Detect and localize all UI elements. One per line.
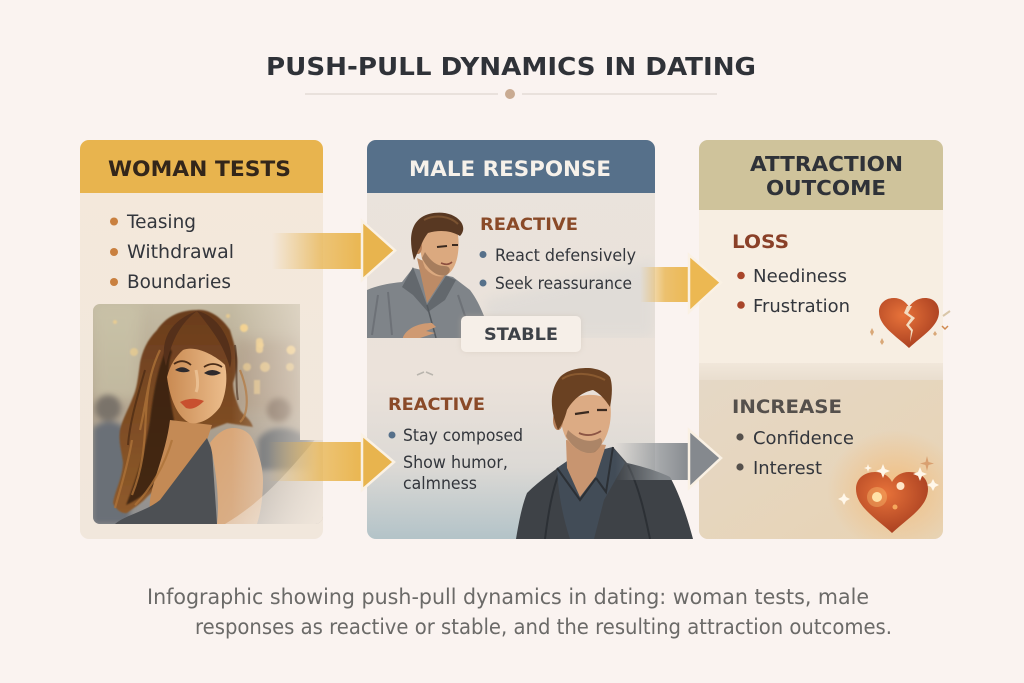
loss section: Frustration: [753, 296, 850, 317]
arrow: woman tests to reactive: [272, 221, 395, 280]
icon: broken heart: [870, 298, 950, 348]
small chevron mark: [417, 372, 433, 375]
lapel shading: [545, 465, 650, 539]
woman tests list: Withdrawal: [127, 241, 234, 263]
shoulder and arm: [210, 428, 263, 524]
icon: glowing heart: [838, 456, 939, 533]
loss section: Neediness: [753, 266, 847, 287]
caption: responses as reactive or stable, and the resulting attraction outcomes.: [195, 615, 892, 639]
woman tests list: Boundaries: [127, 271, 231, 293]
stable reactive block: [388, 395, 523, 494]
stable reactive block: REACTIVE: [388, 395, 485, 415]
reactive block: [480, 215, 636, 294]
face: [167, 349, 226, 423]
woman tests header: [80, 140, 323, 193]
reactive block: Seek reassurance: [495, 274, 632, 294]
loss section: LOSS: [732, 231, 789, 253]
attraction header: ATTRACTION: [750, 152, 903, 176]
woman tests header: WOMAN TESTS: [108, 157, 291, 181]
stable chip: [461, 316, 581, 352]
dark hair shadow: [126, 345, 177, 505]
caption: Infographic showing push-pull dynamics in dating: woman tests, male: [147, 585, 869, 609]
reactive block: React defensively: [495, 246, 636, 266]
eyes: [437, 245, 458, 247]
arrow: woman tests to stable: [268, 435, 394, 490]
ear: [553, 416, 563, 430]
nose highlight: [196, 370, 198, 392]
caption: [147, 585, 892, 639]
panel: woman tests: [80, 140, 324, 539]
arrow: reactive to loss: [640, 255, 721, 312]
hand: [403, 323, 436, 338]
portrait: stable man: [516, 368, 693, 539]
woman tests list: Teasing: [126, 211, 196, 233]
photo: woman at a bar: [93, 304, 324, 524]
arrow: stable to increase: [615, 430, 721, 488]
loss section: [699, 210, 943, 363]
male response header: MALE RESPONSE: [409, 157, 611, 181]
woman tests list: [110, 211, 234, 293]
stubble: [566, 430, 602, 453]
increase section: INCREASE: [732, 396, 842, 418]
background figures: [93, 395, 312, 524]
neck: [566, 440, 606, 497]
hair locks: [115, 350, 247, 508]
increase section: Confidence: [753, 428, 854, 449]
stable reactive block: calmness: [403, 474, 477, 494]
title: PUSH-PULL DYNAMICS IN DATING: [266, 52, 756, 81]
shirt: [367, 268, 486, 338]
stable reactive block: Show humor,: [403, 453, 508, 473]
shirt: [557, 447, 625, 539]
portrait: reactive man: [367, 213, 486, 338]
hair back: [113, 310, 253, 513]
male response header: [367, 140, 655, 193]
panel: male response: [367, 140, 655, 539]
top section shading: [490, 269, 650, 333]
title divider ornament: [305, 89, 717, 99]
eyes: [175, 367, 221, 376]
hair: [552, 368, 612, 430]
increase section: Interest: [753, 458, 822, 479]
section band: [699, 363, 943, 380]
face: [561, 395, 611, 453]
attraction header: [699, 140, 943, 210]
reactive block: REACTIVE: [480, 215, 578, 235]
stubble: [422, 252, 450, 276]
hair: [411, 213, 463, 260]
eyes: [575, 410, 607, 414]
dress: [115, 438, 217, 524]
face: [420, 230, 459, 276]
panel: attraction outcome: [699, 140, 963, 550]
hair front: [164, 311, 231, 368]
suit: [516, 447, 693, 539]
increase section: [699, 380, 943, 539]
attraction header: OUTCOME: [766, 176, 886, 200]
ear: [417, 244, 422, 254]
lips: [180, 399, 204, 409]
stable reactive block: Stay composed: [403, 426, 523, 446]
neck: [417, 258, 447, 303]
chest: [150, 420, 212, 511]
stable chip: STABLE: [484, 325, 558, 345]
